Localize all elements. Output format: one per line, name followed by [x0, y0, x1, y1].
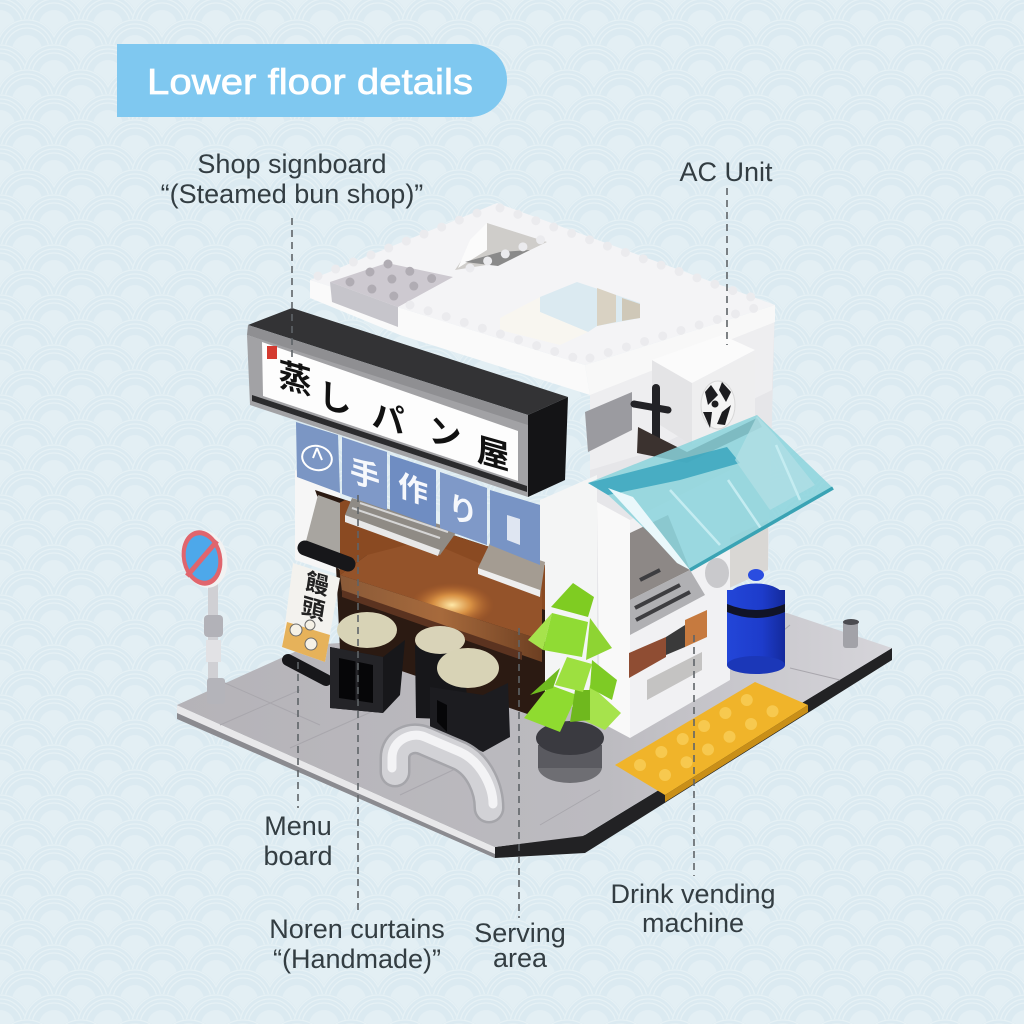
callout line: menu board: [297, 662, 299, 808]
menu board: 頭: [299, 587, 328, 627]
stool: left: [330, 612, 405, 713]
model: building body: [295, 305, 775, 738]
shop signboard: し: [319, 377, 351, 422]
shop signboard: [247, 308, 568, 497]
ac unit: [634, 335, 762, 463]
label: serving area: Serving: [474, 918, 566, 948]
model: base plate: [177, 613, 892, 858]
callout line: ac unit: [726, 188, 728, 345]
small grey post: [843, 619, 859, 648]
stool: rear: [415, 626, 470, 720]
callout line: drink vending machine: [693, 635, 695, 876]
stool: front: [430, 648, 510, 752]
roof opening: sky gap: [500, 282, 640, 345]
label: shop signboard: Shop signboard: [197, 149, 387, 179]
noren curtains: 作: [398, 468, 428, 512]
blue water barrel: [727, 569, 785, 674]
display cases: [345, 498, 545, 597]
label: drink vending machine: Drink vending: [610, 879, 776, 909]
noren curtains: り: [448, 489, 478, 533]
roof studs: [318, 208, 765, 358]
title banner: [117, 44, 507, 117]
silver pipe: [392, 735, 493, 808]
noren curtains: 手: [350, 453, 380, 497]
serving counter: [340, 575, 542, 662]
callout line: shop signboard: [291, 218, 293, 360]
interior shop space: [305, 490, 545, 720]
ac pipe: [634, 388, 668, 440]
menu board: [282, 562, 340, 662]
shop signboard: 蒸: [279, 356, 311, 402]
label: serving area: area: [493, 943, 548, 973]
noren curtains: [296, 422, 540, 565]
label: drink vending machine: machine: [642, 908, 744, 938]
menu board: 饅: [303, 562, 332, 602]
label: shop signboard: “(Steamed bun shop)”: [161, 179, 423, 209]
icon: parking sign post: [177, 526, 233, 704]
yellow tactile plate: [615, 682, 808, 802]
ac fan: [701, 381, 735, 429]
shop signboard: 屋: [477, 432, 509, 477]
shop signboard: パ: [372, 397, 404, 442]
drink vending machine: [597, 470, 730, 738]
potted plant: [524, 583, 621, 783]
title banner: Lower floor details: [147, 61, 473, 102]
black pipes beside menu board: [288, 548, 348, 680]
grey brick with studs: [330, 263, 453, 327]
label: noren curtains: Noren curtains: [269, 914, 445, 944]
callout line: serving area: [518, 628, 520, 918]
icon: steamed bun: [299, 443, 335, 473]
glass awning: [588, 415, 833, 570]
model: roof: [310, 203, 775, 395]
label: noren curtains: “(Handmade)”: [273, 944, 441, 974]
shop signboard: ン: [429, 412, 461, 457]
label: ac unit: AC Unit: [679, 157, 773, 187]
label: menu board: Menu: [264, 811, 332, 841]
label: menu board: board: [263, 841, 333, 871]
pot: [536, 721, 604, 783]
foliage: [524, 583, 621, 732]
roof opening: rear: [455, 223, 547, 270]
callout line: noren curtains: [357, 495, 359, 912]
